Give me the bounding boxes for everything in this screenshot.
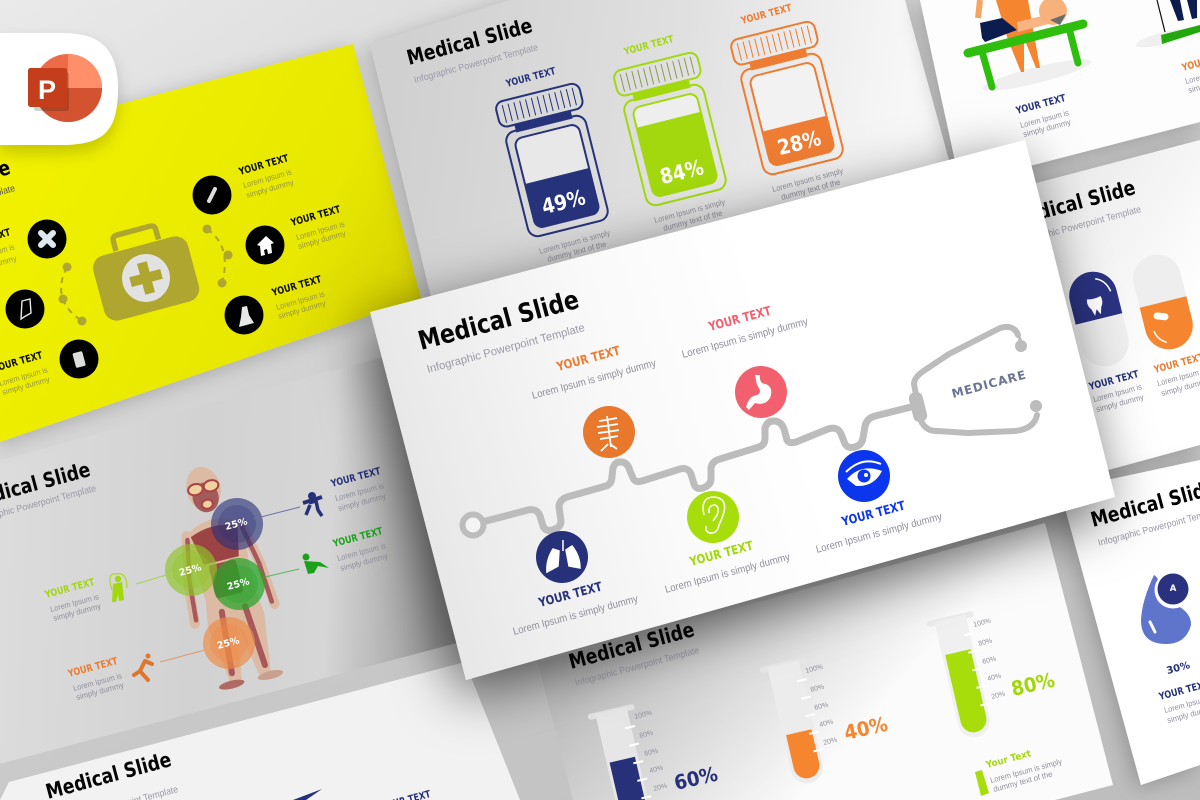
icon: ribcage (583, 406, 635, 458)
test tube: navy 60% (587, 704, 662, 800)
text: bottle navy note (538, 228, 611, 264)
title: bottles slide: Medical Slide (404, 13, 535, 70)
label: right bottom: simply dummy (277, 299, 327, 321)
label: therapy navy: simply dummy (1022, 118, 1072, 139)
label: lime text (43, 577, 102, 623)
icon: stomach (735, 366, 787, 418)
bottle: orange 28%: 28% (775, 126, 824, 160)
panel: bottom-left slide (0, 662, 520, 800)
label: right top (237, 153, 295, 200)
value: 30%: 30% (1165, 660, 1191, 677)
label: right bottom (270, 274, 327, 321)
subtitle: Infographic Powerpoint Template (426, 322, 586, 376)
text: bottle navy note: Lorem Ipsum is simply (538, 228, 611, 256)
panel: anatomy slide (0, 357, 457, 763)
label: lime text: simply dummy (52, 602, 102, 623)
label: right top: simply dummy (245, 178, 295, 200)
title: capsules slide: Medical Slide (1007, 175, 1138, 232)
data circle: lime 25%: 25% (178, 562, 203, 579)
label: green text: Lorem Ipsum is (336, 541, 387, 563)
step: lungs text: Lorem Ipsum is simply dummy (512, 593, 640, 638)
stethoscope timeline (462, 327, 1037, 536)
step: lungs text: YOUR TEXT (536, 578, 604, 610)
icon: navy wedge (293, 789, 322, 800)
bottle: lime 84%: 84% (658, 155, 706, 189)
label: left lower (0, 350, 51, 397)
tube scale: lime: 80% (978, 638, 993, 648)
dotted arc: right (202, 224, 232, 288)
icon: eye (838, 450, 890, 502)
step: eye text: Lorem Ipsum is simply dummy (815, 510, 944, 556)
label: bottle orange heading: YOUR TEXT (739, 3, 793, 27)
data circle: green 25% (213, 558, 265, 610)
data circle: green 25%: 25% (226, 576, 251, 593)
illustration: patient on bench (968, 0, 1093, 96)
MEDICARE label: MEDICARE (950, 368, 1027, 401)
label: orange text (66, 656, 125, 702)
bottle: navy 49%: 49% (539, 185, 588, 219)
label: capsule navy: YOUR TEXT (1087, 369, 1140, 393)
panel: yellow first-aid slide (0, 44, 421, 442)
bottle: lime 84% (612, 51, 730, 208)
legend: Your Text (984, 748, 1033, 771)
title: test tubes slide: Medical Slide (566, 617, 697, 674)
label: capsule navy: simply dummy (1095, 393, 1145, 414)
label: navy text (329, 466, 387, 513)
panel: therapy slide (920, 0, 1200, 184)
tube scale: lime: 20% (991, 691, 1006, 701)
step: ribcage text: YOUR TEXT (554, 342, 622, 374)
icon: flask (224, 296, 264, 334)
test tube: lime 80% (926, 611, 1001, 742)
icon: first-aid kit (86, 218, 202, 324)
step: ribcage text: Lorem Ipsum is simply dummy (531, 357, 658, 402)
step: ear text: Lorem Ipsum is simply dummy (664, 551, 792, 596)
label: blood-type (1157, 679, 1200, 725)
data circle: lime 25% (165, 544, 217, 596)
data circle: navy 25%: 25% (224, 516, 249, 533)
label: therapy navy: Lorem Ipsum is (1019, 108, 1070, 130)
anatomy figure (158, 457, 292, 694)
icon: runner (134, 654, 152, 680)
label: right bottom: Lorem Ipsum is (275, 289, 326, 312)
label: right middle: simply dummy (297, 229, 347, 251)
tube scale: navy: 80% (639, 730, 654, 740)
capsule: navy tooth (1064, 267, 1134, 371)
step: stomach text: YOUR TEXT (706, 303, 773, 334)
tube scale: navy: 60% (644, 748, 659, 758)
icon: bandage (28, 220, 66, 258)
label: therapy orange (1180, 50, 1200, 95)
icon: pill bottle (60, 340, 98, 378)
text: bottle lime note: dummy text of the (662, 208, 724, 233)
label: green text (331, 526, 389, 573)
subtitle: test tubes slide: Infographic Powerpoint Template (574, 645, 700, 689)
label: orange text: YOUR TEXT (66, 656, 119, 680)
tube scale: orange: 100% (805, 664, 824, 675)
tube scale: navy: 40% (649, 765, 664, 775)
label: bottle navy heading: YOUR TEXT (504, 66, 557, 90)
icon: PowerPoint logo: P (38, 75, 56, 105)
label: green text: simply dummy (339, 552, 389, 573)
value: 40%: 40% (842, 712, 890, 745)
capsule: orange pill (1128, 250, 1198, 354)
icon: blood drop: A (1170, 584, 1177, 594)
legend: dummy text of the (992, 769, 1054, 794)
label: right middle: Lorem Ipsum is (295, 219, 346, 242)
label: capsule navy: Lorem Ipsum is (1092, 382, 1143, 404)
tube scale: orange: 20% (823, 737, 838, 747)
tube scale: lime: 60% (982, 656, 997, 666)
panel: capsules slide (1007, 140, 1200, 475)
icon: home (246, 226, 284, 264)
icon: skipping rope (110, 574, 127, 602)
stethoscope parts (908, 333, 1042, 423)
label: capsule orange (1152, 352, 1200, 398)
tube scale: lime: 100% (973, 618, 992, 629)
legend (975, 748, 1063, 796)
tube scale: orange (805, 664, 838, 747)
step: ear text: YOUR TEXT (687, 537, 755, 569)
label: left upper (0, 227, 18, 276)
subtitle: capsules slide: Infographic Powerpoint Template (1016, 204, 1142, 248)
panel: bottles slide (370, 0, 960, 322)
value: 60%: 60% (672, 762, 720, 795)
data circle: orange 25%: 25% (216, 635, 241, 652)
step: eye text: YOUR TEXT (839, 497, 907, 529)
panel: blood-type slide (1060, 460, 1200, 785)
label: navy text: Lorem Ipsum is (334, 481, 385, 503)
text: bottle navy note: dummy text of the (546, 239, 608, 264)
subtitle: bottles slide: Infographic Powerpoint Template (413, 42, 539, 86)
label: bottle lime heading: YOUR TEXT (622, 34, 675, 58)
data circle: orange 25% (203, 617, 255, 669)
label: orange text: simply dummy (75, 681, 125, 702)
illustration: second patient (1134, 0, 1200, 51)
text: bottle lime note (653, 197, 726, 233)
label: lime text: Lorem Ipsum is (49, 592, 100, 614)
icon: vial (6, 290, 44, 328)
icon: seated exercise (302, 554, 329, 574)
tube scale: orange: 60% (814, 702, 829, 712)
icon: syringe tip (192, 176, 232, 214)
icon: weightlifter (303, 492, 322, 516)
bottle: navy 49% (494, 82, 612, 239)
label: right middle (289, 204, 347, 251)
tube scale: lime (973, 618, 1006, 701)
label: capsule navy (1087, 369, 1145, 414)
text: bottle orange note (771, 166, 844, 202)
icon: blood drop (1141, 572, 1192, 644)
label: right top: Lorem Ipsum is (242, 167, 293, 190)
value: 80%: 80% (1009, 668, 1057, 701)
step: stomach text: Lorem Ipsum is simply dummy (681, 315, 810, 361)
label: lime text: YOUR TEXT (43, 577, 96, 601)
label: navy text: YOUR TEXT (329, 466, 382, 490)
label: therapy navy (1014, 93, 1072, 139)
label: green text: YOUR TEXT (331, 526, 384, 550)
legend: Lorem Ipsum is simply (989, 757, 1063, 785)
tube scale: navy: 100% (634, 710, 653, 721)
label: left lower: simply dummy (1, 375, 51, 397)
panel: test tubes slide (538, 523, 1113, 800)
text: bottle orange note: dummy text of the (780, 177, 842, 202)
tube scale: orange: 40% (819, 719, 834, 729)
label: right top: YOUR TEXT (237, 153, 290, 178)
icon: ear (687, 491, 739, 543)
panel: main stethoscope slide (370, 140, 1115, 680)
badge: PowerPoint (0, 33, 118, 145)
label: right middle: YOUR TEXT (289, 204, 342, 229)
bottle: orange 28% (729, 20, 847, 177)
label: right bottom: YOUR TEXT (270, 274, 323, 299)
label: therapy navy: YOUR TEXT (1014, 93, 1067, 117)
label: orange text: Lorem Ipsum is (72, 671, 123, 693)
test tube: orange 40% (759, 657, 834, 788)
tube scale: lime: 40% (987, 673, 1002, 683)
tube scale: navy (634, 710, 668, 793)
connector arrows (136, 507, 300, 662)
tube scale: orange: 80% (810, 684, 825, 694)
title: Medical Slide (415, 285, 582, 357)
text: bottle orange note: Lorem Ipsum is simply (771, 166, 844, 194)
data circle: navy 25% (211, 498, 263, 550)
tube scale: navy: 20% (653, 783, 668, 793)
icon: lungs (536, 531, 588, 583)
label: navy text: simply dummy (337, 492, 387, 513)
dotted arc: left (58, 262, 86, 326)
text: bottle lime note: Lorem Ipsum is simply (653, 197, 726, 225)
